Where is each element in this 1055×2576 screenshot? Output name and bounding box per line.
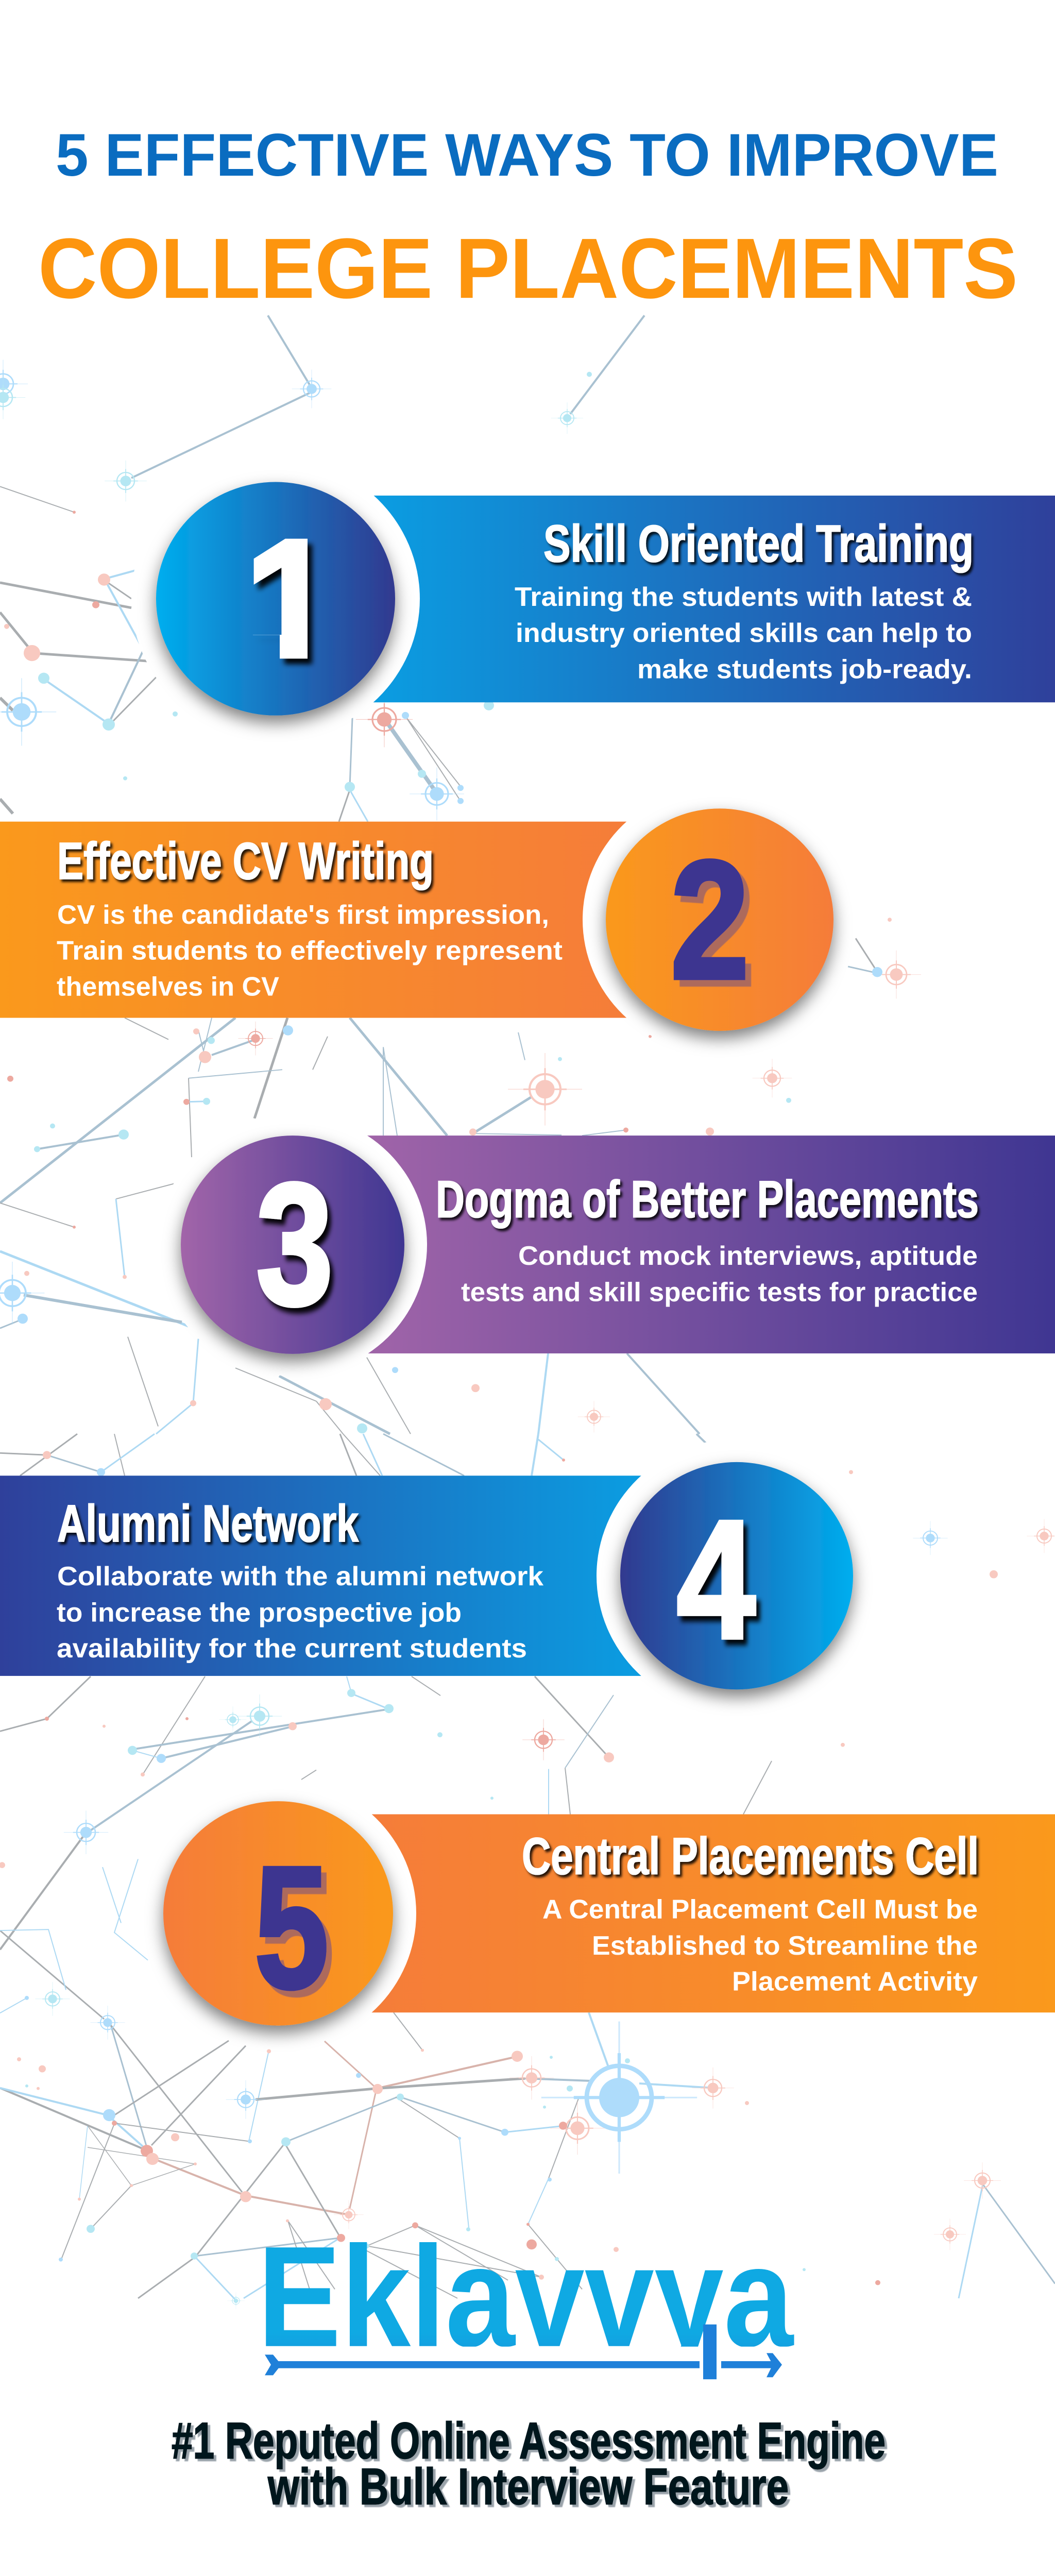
white cutout 5 bbox=[140, 1778, 416, 2048]
panel 3: dogma of better placements bbox=[158, 1113, 1055, 1376]
band 1 bbox=[361, 496, 1055, 702]
body text 1: Training the students with latest & bbox=[515, 582, 972, 612]
body text 4 bbox=[57, 1562, 544, 1664]
panel 4: alumni network bbox=[0, 1439, 877, 1713]
body text 3: Conduct mock interviews, aptitude bbox=[518, 1242, 978, 1271]
band 3 bbox=[355, 1136, 1055, 1353]
title: 5 effective ways to improve: 5 EFFECTIVE WAYS TO IMPROVE bbox=[56, 122, 998, 189]
body text 2: Train students to effectively represent bbox=[57, 936, 563, 965]
number circle 3 bbox=[181, 1136, 404, 1354]
logo arrow bbox=[265, 2325, 782, 2379]
body text 1: make students job-ready. bbox=[637, 655, 972, 684]
body text 4: to increase the prospective job bbox=[57, 1598, 462, 1628]
logo: Eklavvya bbox=[265, 2242, 794, 2379]
body text 4: Collaborate with the alumni network bbox=[57, 1562, 544, 1591]
body text 5: Placement Activity bbox=[732, 1967, 978, 1996]
heading 2: Effective CV Writing bbox=[57, 832, 434, 890]
band 2 bbox=[0, 822, 639, 1018]
number circle 1 bbox=[156, 482, 395, 716]
body text 2: themselves in CV bbox=[57, 972, 279, 1002]
tagline bbox=[172, 2413, 886, 2515]
body text 4: availability for the current students bbox=[57, 1634, 527, 1664]
white cutout 2 bbox=[583, 786, 857, 1054]
number circle 5 bbox=[163, 1801, 393, 2026]
body text 1: industry oriented skills can help to bbox=[516, 619, 972, 648]
white cutout 3 bbox=[158, 1113, 427, 1376]
body text 3: tests and skill specific tests for practice bbox=[461, 1278, 978, 1307]
background network of connected nodes bbox=[0, 315, 1055, 2309]
panel 2: effective cv writing bbox=[0, 786, 857, 1054]
heading 4: Alumni Network bbox=[57, 1494, 359, 1553]
number circle 2 bbox=[606, 808, 833, 1031]
body text 5 bbox=[542, 1895, 978, 1996]
band 5 bbox=[361, 1814, 1055, 2012]
body text 2 bbox=[57, 901, 563, 1002]
tagline: with Bulk Interview Feature bbox=[267, 2458, 789, 2515]
number 5: 5 bbox=[254, 1830, 329, 2024]
white cutout 4 bbox=[597, 1439, 877, 1713]
number 2: 2 bbox=[671, 826, 749, 1014]
logo wordmark: Eklavvya bbox=[258, 2216, 794, 2378]
panel 5: central placements cell bbox=[140, 1778, 1055, 2048]
band 4 bbox=[0, 1476, 654, 1676]
white cutout 1 bbox=[131, 458, 420, 740]
number circle 4 bbox=[620, 1462, 853, 1689]
body text 5: A Central Placement Cell Must be bbox=[542, 1895, 978, 1924]
body text 1 bbox=[515, 582, 972, 684]
body text 3 bbox=[461, 1242, 978, 1307]
body text 2: CV is the candidate's first impression, bbox=[57, 901, 549, 930]
panel 1: skill oriented training bbox=[131, 458, 1055, 740]
body text 5: Established to Streamline the bbox=[592, 1931, 978, 1961]
number 4: 4 bbox=[677, 1486, 756, 1674]
number 1: 1 bbox=[246, 507, 339, 690]
number 3: 3 bbox=[256, 1147, 333, 1341]
